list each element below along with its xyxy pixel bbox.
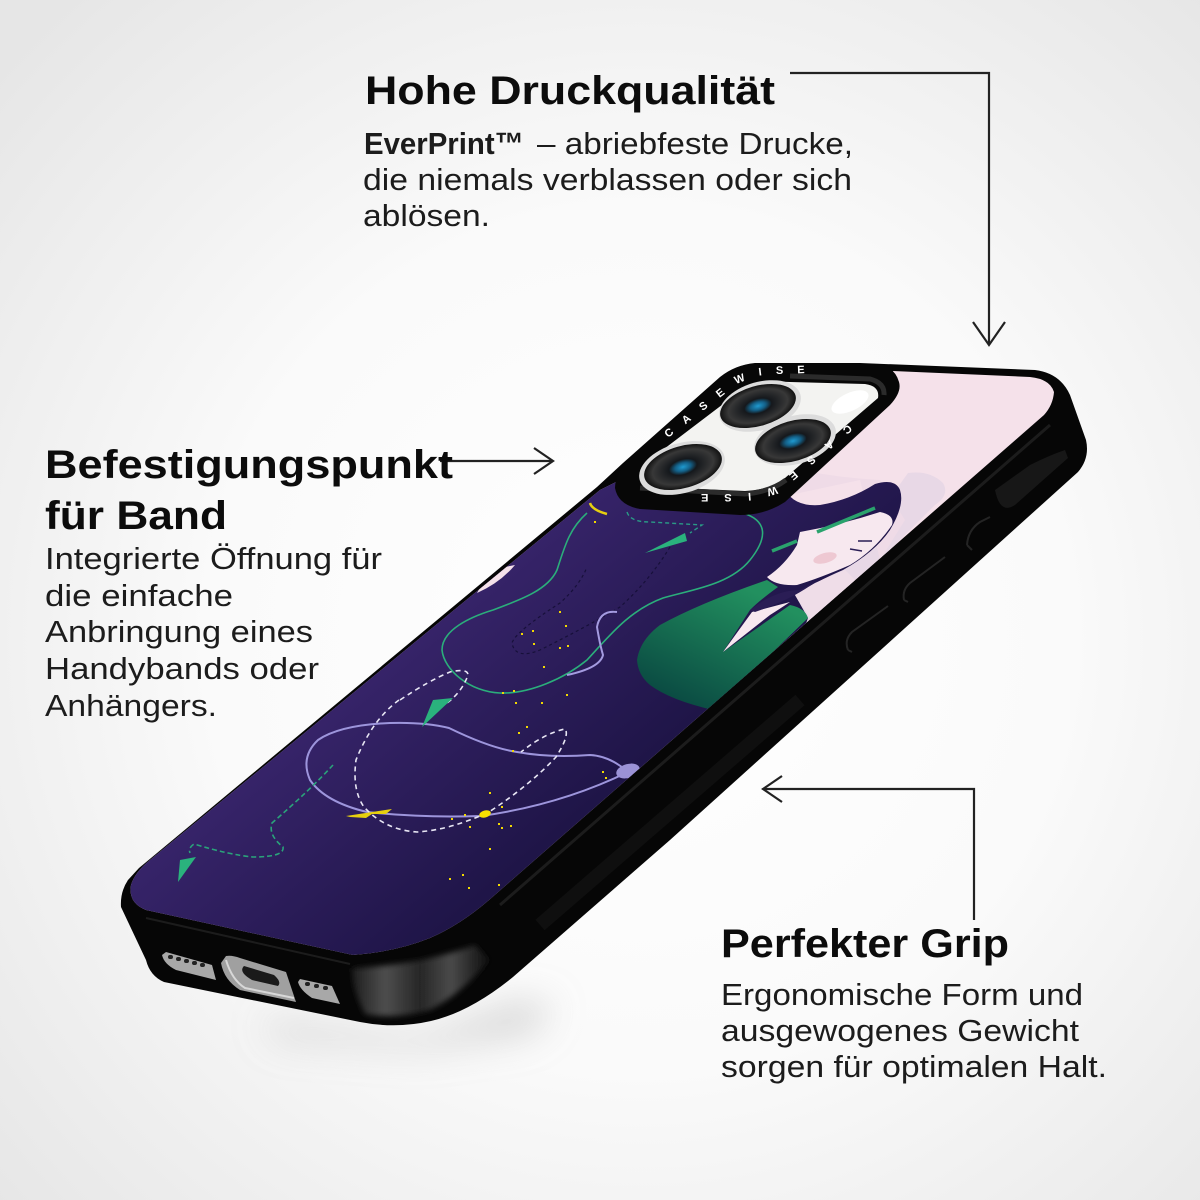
green clothing	[637, 580, 808, 710]
grip lump	[995, 450, 1068, 508]
text: grip: sorgen für optimalen Halt.	[721, 1049, 1107, 1084]
text: print quality: – abriebfeste Drucke,	[537, 126, 853, 161]
soft mauve cloud	[784, 472, 945, 642]
bottom edge bevel	[146, 918, 350, 964]
heading: strap attachment: für Band	[45, 494, 227, 538]
yellow planet	[479, 810, 491, 818]
white collar	[723, 602, 790, 652]
yellow ring	[590, 503, 607, 514]
text: print quality: ablösen.	[363, 198, 490, 233]
heading: strap attachment	[45, 443, 453, 538]
text: grip: Ergonomische Form und	[721, 977, 1083, 1012]
pink background	[120, 360, 1070, 960]
arrow: bottom right	[763, 776, 974, 920]
bump ring	[615, 363, 900, 515]
white dashed orbit	[355, 671, 566, 832]
paper plane top	[645, 533, 687, 553]
lavender squiggle	[567, 612, 617, 675]
side rim highlight	[500, 425, 1050, 905]
side button small	[967, 517, 990, 550]
text: strap attachment: Anbringung eines	[45, 614, 313, 649]
text: strap attachment: Anhängers.	[45, 688, 217, 723]
arrow: left	[440, 448, 553, 474]
text: print quality: EverPrint™	[364, 126, 524, 161]
cheek	[814, 552, 836, 564]
green dashed path	[190, 765, 333, 857]
side texture	[540, 700, 800, 925]
arrow: top	[790, 73, 1005, 345]
text: print quality: die niemals verblassen oder sich	[363, 162, 852, 197]
heading: strap attachment: Befestigungspunkt	[45, 443, 453, 487]
side button long	[904, 557, 945, 602]
heading: grip: Perfekter Grip	[721, 922, 1009, 966]
camera window	[642, 382, 878, 491]
inner ring shadow	[640, 376, 884, 494]
phone case	[121, 363, 1087, 1025]
lavender orbit loop	[306, 723, 628, 816]
paper plane bottom	[178, 857, 196, 882]
left speaker	[162, 952, 216, 980]
heading: print quality: Hohe Druckqualität	[365, 69, 775, 113]
charging port	[221, 956, 296, 1002]
lens top	[713, 371, 807, 441]
phone shadow	[260, 1000, 555, 1050]
right speaker	[298, 979, 340, 1004]
pink slice top left	[477, 565, 515, 593]
text: grip: ausgewogenes Gewicht	[721, 1013, 1079, 1048]
faint dark dashed path	[512, 547, 670, 654]
text: strap attachment: die einfache	[45, 578, 233, 613]
closed eye	[850, 541, 872, 551]
yellow winged marker	[346, 809, 392, 818]
case body	[121, 363, 1087, 1025]
brand text bottom: CASEWISE	[701, 426, 852, 502]
text: strap attachment	[45, 541, 382, 723]
yellow stars	[449, 522, 607, 888]
green hair strands	[772, 508, 875, 551]
teal dashed path top	[627, 512, 702, 533]
pink neck gap	[795, 580, 855, 618]
text: print quality	[363, 126, 853, 233]
lens right	[748, 405, 842, 475]
soft hair shadow	[880, 556, 882, 559]
paper plane middle	[422, 698, 453, 727]
corner highlight	[352, 945, 490, 1016]
figure face	[767, 512, 892, 585]
purple field	[120, 470, 901, 965]
dark collar stripe	[750, 584, 812, 612]
lens left	[633, 432, 731, 504]
brand text top: CASEWISE	[665, 366, 804, 436]
text: strap attachment: Handybands oder	[45, 651, 319, 686]
flash	[828, 385, 872, 419]
side button lower	[847, 606, 888, 652]
green trajectory	[442, 513, 763, 693]
text: grip	[721, 977, 1107, 1084]
planet	[616, 764, 640, 778]
printed back artwork	[120, 360, 1070, 965]
text: strap attachment: Integrierte Öffnung für	[45, 541, 382, 576]
camera bump	[615, 365, 900, 515]
